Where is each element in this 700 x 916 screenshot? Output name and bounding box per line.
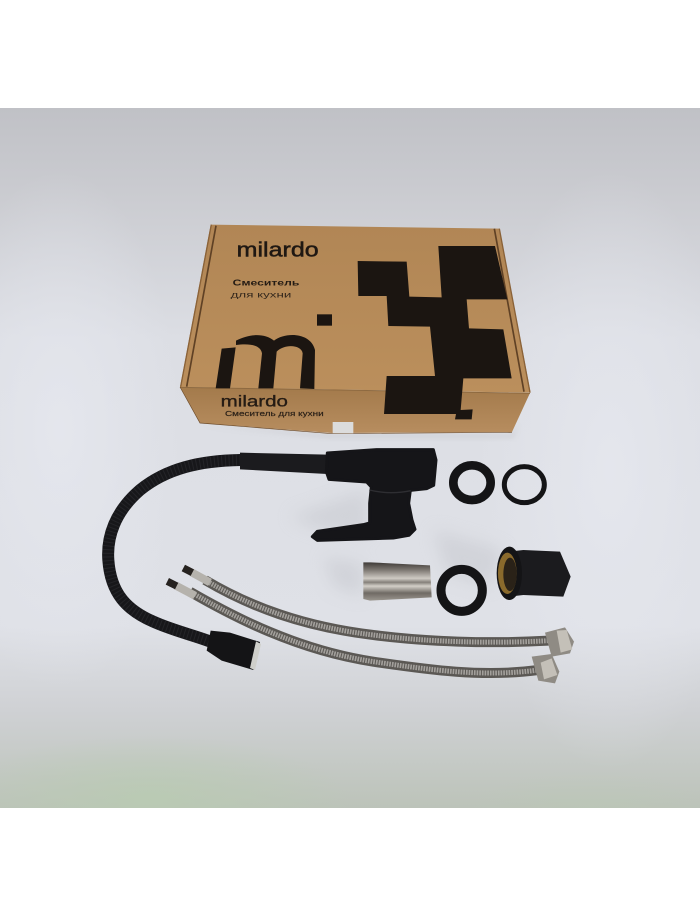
mounting nut [497,547,571,600]
pattern graphic [358,246,512,419]
box top face [180,225,531,393]
product subtitle: для кухни [231,290,292,300]
brand logo top: milardo [237,239,319,262]
spray head [207,631,261,670]
large letter m [216,335,315,389]
box edges [181,225,530,393]
braided hose upper [183,568,574,657]
flexible hose [108,460,241,643]
braided hose lower [167,581,559,683]
front product text: Смеситель для кухни [225,411,324,418]
soft shadows [290,490,503,597]
brand logo front: milardo [221,394,288,411]
rubber washer one [453,465,491,500]
product name: Смеситель [233,277,299,287]
box shadow [200,423,518,437]
steel sleeve [363,562,432,601]
faucet body [312,450,436,540]
rubber washer three [441,569,482,611]
square dot [317,314,332,326]
pull tube [240,453,327,474]
faucet parts [108,450,574,683]
box front face [180,387,530,433]
product box [180,225,531,437]
box label [333,422,353,433]
rubber washer two [504,467,544,503]
